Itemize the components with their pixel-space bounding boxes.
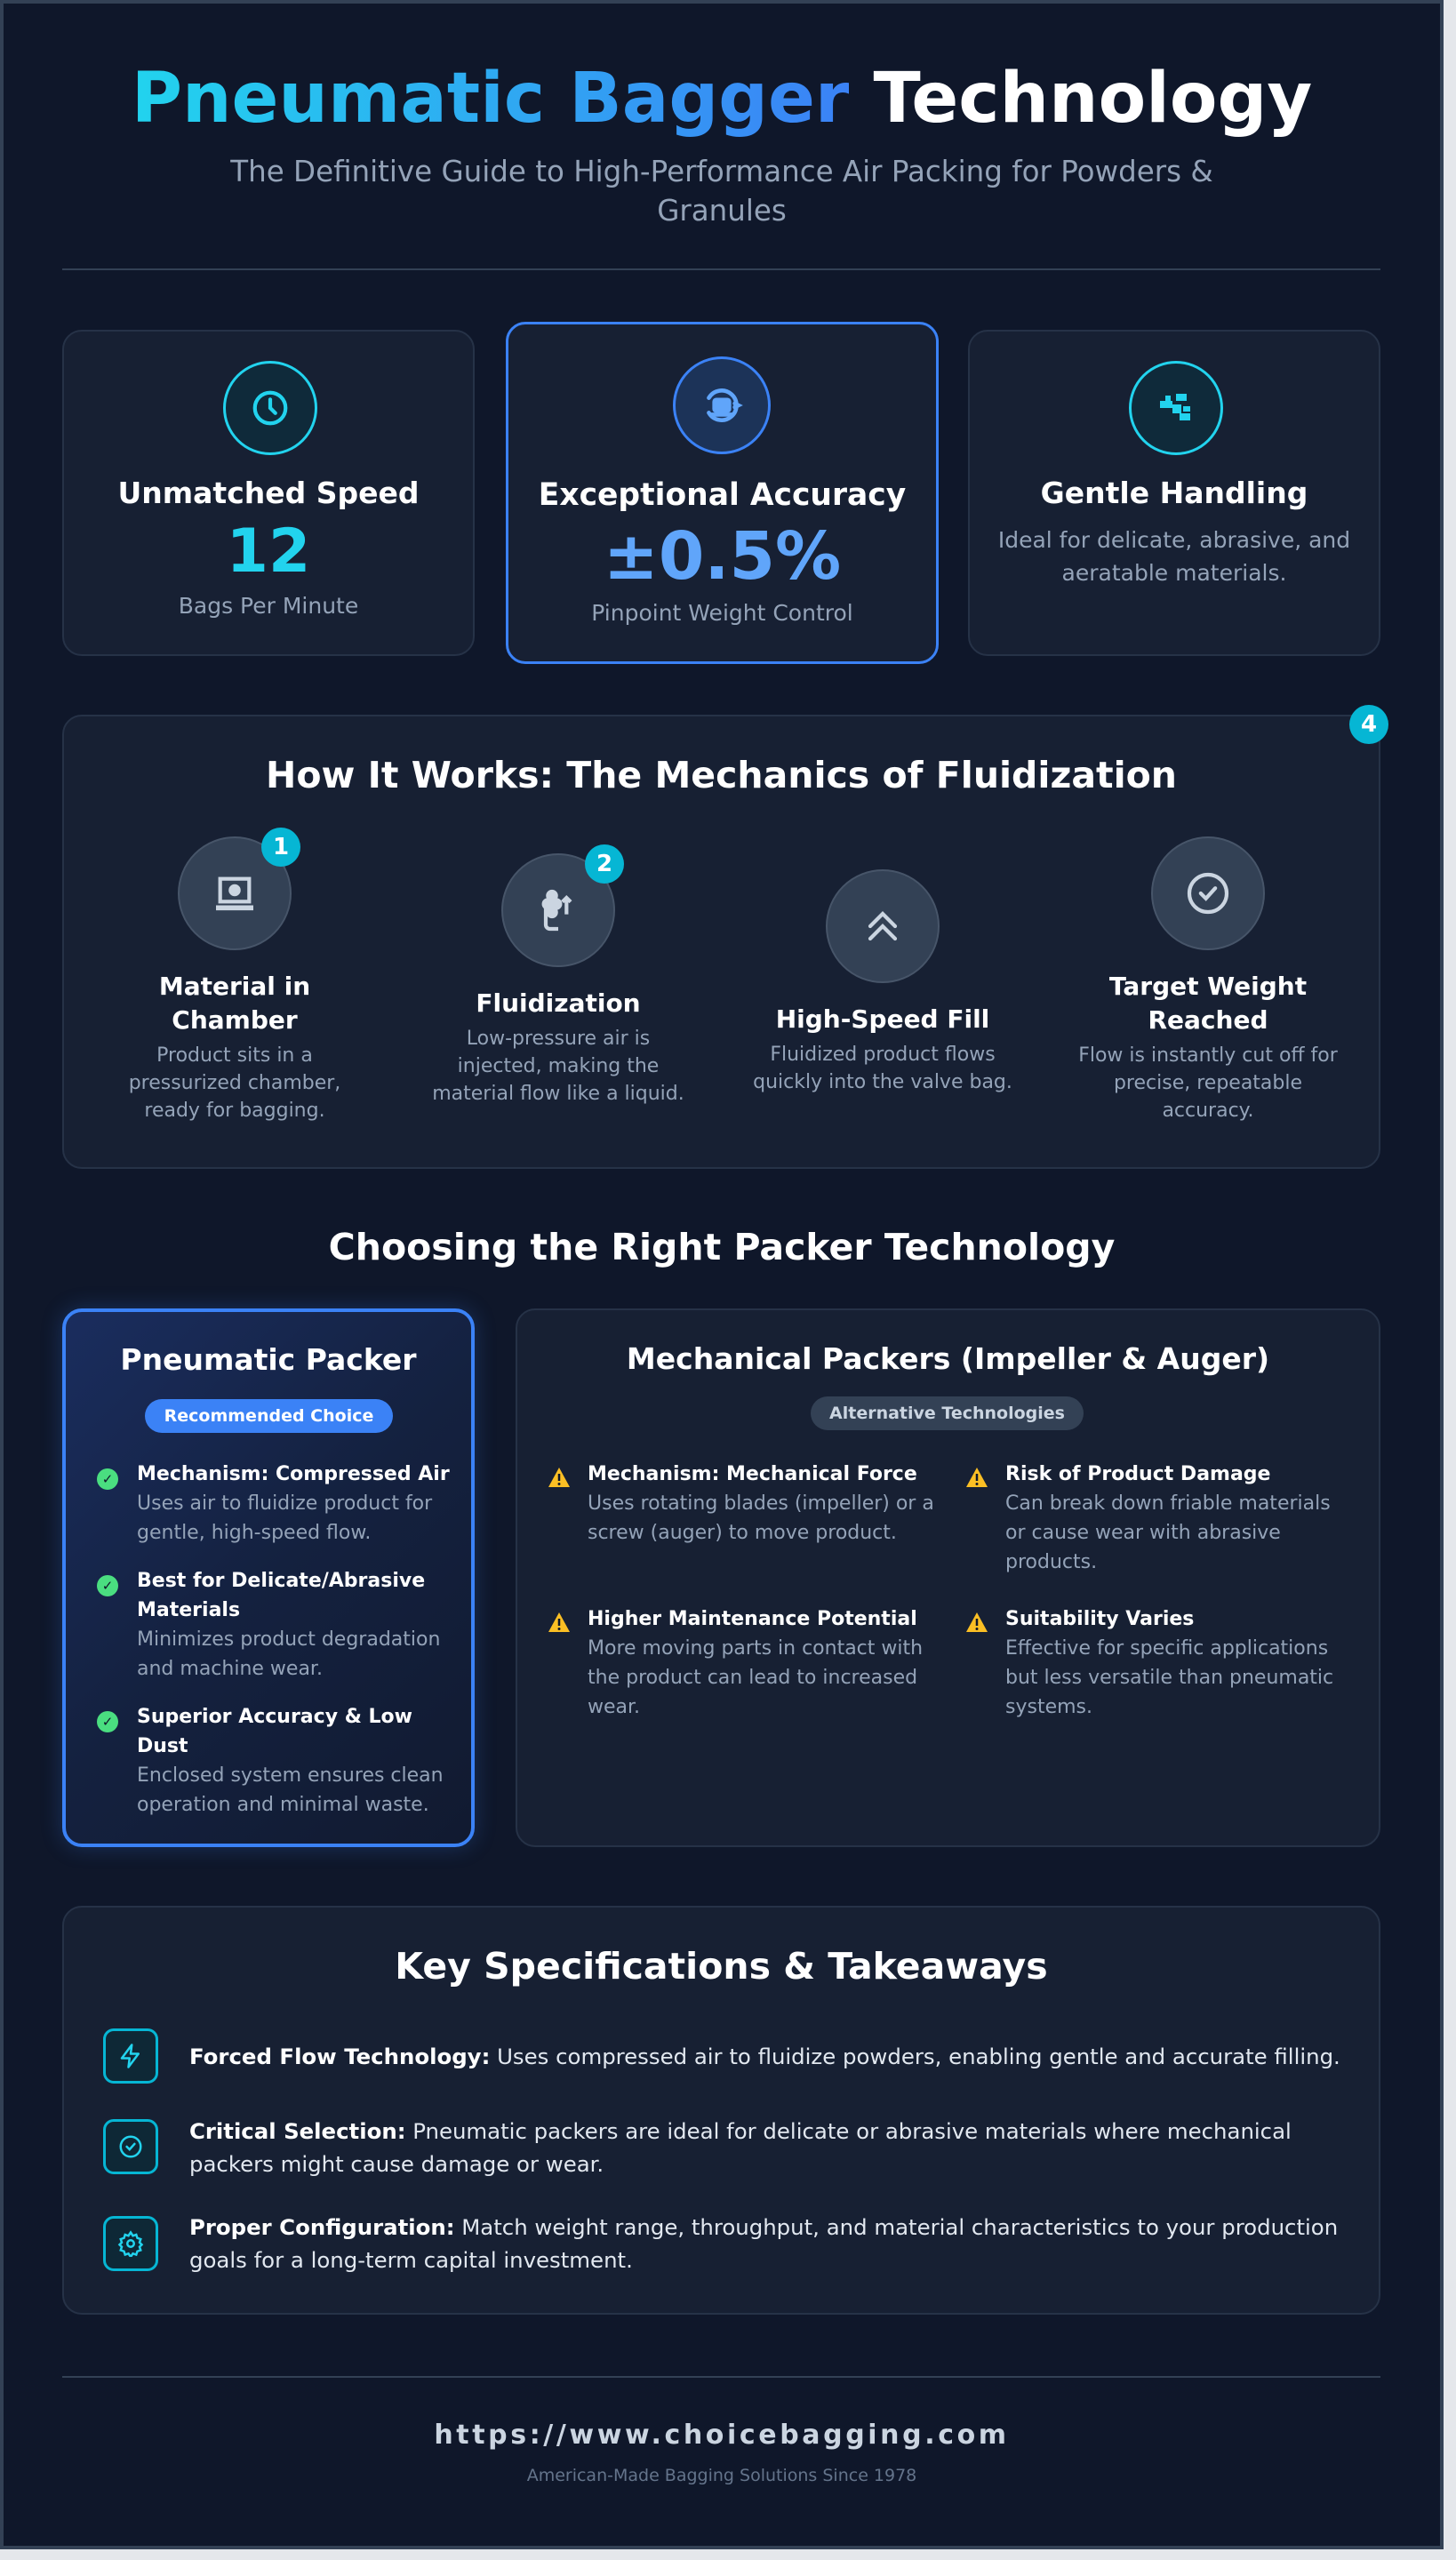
stat title: Gentle Handling — [1041, 476, 1308, 510]
icon: fluidization — [501, 853, 615, 967]
heading: Key Specifications & Takeaways — [395, 1945, 1048, 1988]
item: delicate: and machine wear. — [137, 1658, 323, 1680]
badge 4: 4 — [1361, 711, 1377, 738]
item: accuracy — [97, 1706, 444, 1816]
takeaway 2 — [189, 2118, 1292, 2177]
footer tagline: American-Made Bagging Solutions Since 1978 — [527, 2466, 916, 2485]
item: suitability: Suitability Varies — [1005, 1608, 1194, 1630]
heading: How It Works: The Mechanics of Fluidization — [266, 754, 1177, 796]
step description — [432, 1028, 684, 1105]
badge 4 — [1349, 705, 1388, 744]
step title: Target Weight — [1109, 972, 1307, 1001]
stat title: Unmatched Speed — [117, 476, 420, 510]
item: compressed air: gentle, high-speed flow. — [137, 1522, 371, 1544]
step 2 — [432, 853, 684, 1105]
step title: High-Speed Fill — [776, 1004, 989, 1034]
item: delicate: ✓ — [102, 1578, 113, 1594]
step description — [129, 1044, 340, 1122]
subtitle: The Definitive Guide to High-Performance Air Packing for Powders & Granules — [230, 155, 1213, 228]
item: suitability: Effective for specific applications — [1005, 1637, 1328, 1660]
step title: Fluidization — [476, 988, 641, 1018]
stat card: accuracy — [506, 322, 939, 664]
icon: check — [103, 2119, 158, 2174]
step description: pressurized chamber, — [129, 1072, 340, 1094]
card title: Pneumatic Packer — [120, 1342, 417, 1377]
item: delicate: Materials — [137, 1599, 240, 1621]
step description: quickly into the valve bag. — [753, 1071, 1012, 1093]
badge 2 — [585, 844, 624, 884]
step 1 — [129, 836, 340, 1122]
panel: pneumatic packer — [62, 1308, 475, 1847]
takeaway 3: goals for a long-term capital investment. — [189, 2247, 633, 2273]
item: maintenance: More moving parts in contact with — [588, 1637, 923, 1660]
item: product damage — [966, 1463, 1331, 1573]
item: delicate: Minimizes product degradation — [137, 1628, 440, 1651]
item: maintenance: the product can lead to increased — [588, 1667, 917, 1689]
step description: injected, making the — [458, 1055, 659, 1077]
takeaway 2: packers might cause damage or wear. — [189, 2151, 604, 2177]
badge: recommended: Recommended Choice — [164, 1406, 373, 1426]
badge 1: 1 — [273, 834, 289, 860]
step description — [1078, 1044, 1338, 1122]
stat value: ±0.5% — [604, 518, 841, 595]
item: maintenance — [548, 1608, 923, 1718]
badge 1 — [261, 828, 300, 867]
item: suitability: systems. — [1005, 1696, 1092, 1718]
item: maintenance: Higher Maintenance Potential — [588, 1608, 917, 1630]
item: compressed air: ✓ — [102, 1471, 113, 1487]
badge: recommended — [145, 1399, 393, 1433]
step description: Flow is instantly cut off for — [1078, 1044, 1338, 1067]
stat card: speed — [62, 330, 475, 656]
item: compressed air — [97, 1463, 450, 1544]
icon: chamber — [178, 836, 292, 950]
card title: Mechanical Packers (Impeller & Auger) — [627, 1341, 1269, 1376]
stat card: gentle — [968, 330, 1380, 656]
item: accuracy: ✓ — [102, 1714, 113, 1730]
item: delicate — [97, 1570, 440, 1680]
item: compressed air: Uses air to fluidize product for — [137, 1492, 432, 1515]
panel: key specifications — [62, 1906, 1380, 2315]
icon: check circle — [1151, 836, 1265, 950]
step 4 — [1078, 836, 1338, 1122]
step description: accuracy. — [1162, 1100, 1254, 1122]
item: mechanical force: Uses rotating blades (impeller) or a — [588, 1492, 934, 1515]
icon: gentle handling — [1129, 361, 1223, 455]
step title: Chamber — [172, 1005, 298, 1035]
badge: alternative — [811, 1396, 1084, 1430]
step title — [1109, 972, 1307, 1035]
step description: Fluidized product flows — [770, 1044, 996, 1066]
stat title: Exceptional Accuracy — [539, 477, 906, 513]
stat label: Pinpoint Weight Control — [591, 600, 853, 626]
stat value: 12 — [227, 516, 310, 587]
step title: Material in — [159, 972, 310, 1001]
panel: how it works — [62, 715, 1380, 1169]
item: mechanical force: screw (auger) to move product. — [588, 1522, 897, 1544]
item: suitability — [966, 1608, 1333, 1718]
takeaway 1: Forced Flow Technology: Uses compressed air to fluidize powders, enabling gentle and accurate filling. — [189, 2044, 1340, 2069]
step 3 — [753, 869, 1012, 1093]
item: accuracy: Enclosed system ensures clean — [137, 1764, 444, 1787]
step description: Low-pressure air is — [467, 1028, 650, 1050]
item: compressed air: Mechanism: Compressed Air — [137, 1463, 450, 1485]
icon: chevrons up — [826, 869, 940, 983]
icon: gear — [103, 2216, 158, 2271]
item: product damage: products. — [1005, 1551, 1097, 1573]
step description: material flow like a liquid. — [432, 1083, 684, 1105]
takeaway 2: Critical Selection: Pneumatic packers are ideal for delicate or abrasive materials where mechanical — [189, 2118, 1292, 2144]
footer url: https://www.choicebagging.com — [434, 2420, 1010, 2451]
item: product damage: or cause wear with abrasive — [1005, 1522, 1281, 1544]
section heading: choosing: Choosing the Right Packer Technology — [329, 1226, 1115, 1268]
item: delicate: Best for Delicate/Abrasive — [137, 1570, 425, 1592]
item: suitability: but less versatile than pneumatic — [1005, 1667, 1333, 1689]
item: product damage: Can break down friable materials — [1005, 1492, 1331, 1515]
step title — [159, 972, 310, 1035]
item: accuracy: operation and minimal waste. — [137, 1794, 429, 1816]
item: maintenance: wear. — [588, 1696, 640, 1718]
item: accuracy: Superior Accuracy & Low — [137, 1706, 412, 1728]
item: product damage: Risk of Product Damage — [1005, 1463, 1270, 1485]
step description — [753, 1044, 1012, 1093]
step description: precise, repeatable — [1114, 1072, 1302, 1094]
step description: Product sits in a — [156, 1044, 313, 1067]
title: Pneumatic Bagger Technology — [132, 59, 1312, 139]
step description: ready for bagging. — [144, 1100, 325, 1122]
icon: scale — [673, 356, 771, 454]
stat description: Ideal for delicate, abrasive, and aeratable materials. — [998, 527, 1350, 586]
takeaway 3: Proper Configuration: Match weight range, throughput, and material characteristics to your production — [189, 2214, 1338, 2240]
badge: alternative: Alternative Technologies — [829, 1404, 1065, 1423]
icon: bolt — [103, 2028, 158, 2084]
stat label: Bags Per Minute — [179, 593, 358, 619]
item: mechanical force: Mechanism: Mechanical Force — [588, 1463, 917, 1485]
takeaway 3 — [189, 2214, 1338, 2273]
item: mechanical force — [548, 1463, 934, 1544]
step title: Reached — [1148, 1005, 1268, 1035]
badge 2: 2 — [596, 851, 612, 877]
item: accuracy: Dust — [137, 1735, 188, 1757]
icon: clock — [223, 361, 317, 455]
panel: mechanical packers — [516, 1308, 1380, 1847]
